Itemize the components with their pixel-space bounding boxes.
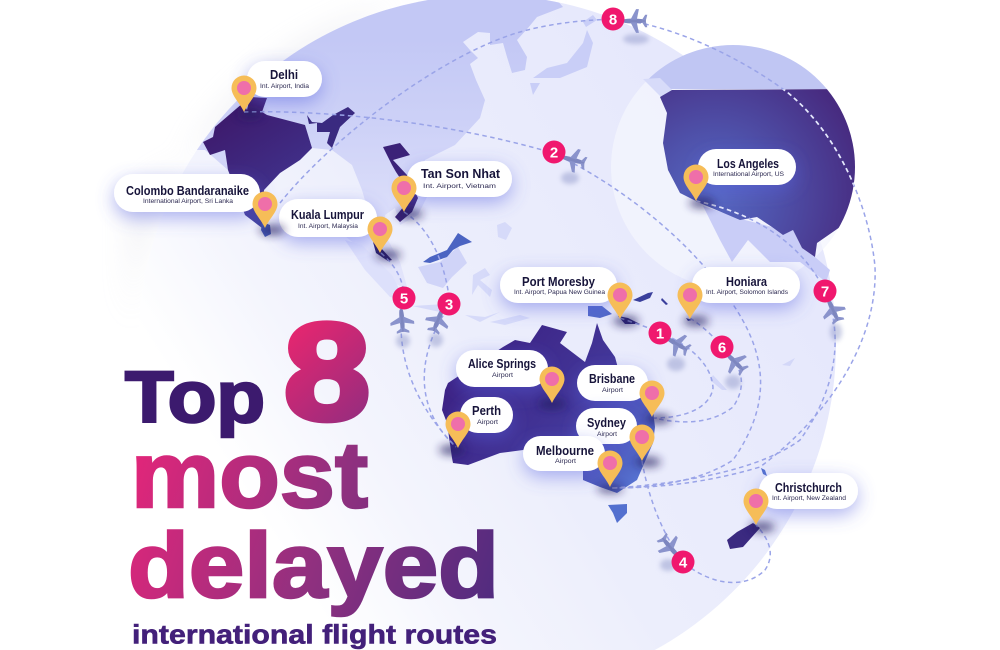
label: Melbourne: Melbourne bbox=[536, 444, 594, 458]
route 7 bbox=[612, 201, 835, 488]
pin: Delhi bbox=[232, 76, 256, 112]
route 4 bbox=[642, 461, 770, 582]
plane shadows bbox=[396, 34, 842, 571]
label: Melbourne bbox=[523, 436, 605, 471]
route 3 bbox=[404, 212, 456, 447]
badge 7: 7 bbox=[821, 284, 829, 300]
route 2 bbox=[244, 112, 761, 488]
title: Top: Top bbox=[125, 358, 265, 438]
pin: Colombo bbox=[252, 192, 278, 228]
label: Colombo Bandaranaike bbox=[114, 174, 260, 212]
plane 4 bbox=[652, 529, 686, 563]
land: Indonesia bbox=[412, 222, 530, 325]
label: Honiara: Int. Airport, Solomon Islands bbox=[706, 289, 788, 296]
title: delayed: delayed bbox=[128, 515, 499, 617]
land: Borneo bbox=[418, 247, 467, 288]
plane 1 bbox=[661, 328, 694, 361]
land: New Caledonia bbox=[710, 358, 795, 390]
land: East Malaysia bbox=[423, 233, 472, 263]
land: Vietnam bbox=[383, 143, 418, 222]
label: Brisbane: Brisbane bbox=[589, 372, 635, 386]
label: Melbourne: Airport bbox=[555, 458, 576, 465]
badge 1 bbox=[648, 322, 672, 344]
plane 2 bbox=[559, 146, 589, 175]
land: Canada bbox=[649, 45, 827, 90]
label: Tan Son Nhat bbox=[407, 161, 512, 197]
label: Perth: Perth bbox=[472, 404, 501, 418]
land: North-east India bbox=[307, 107, 355, 148]
label: Alice Springs bbox=[456, 350, 548, 387]
label: Brisbane: Airport bbox=[602, 387, 623, 394]
land: Peninsular Malaysia bbox=[373, 242, 392, 261]
title bbox=[125, 296, 499, 650]
land: Alaska strip bbox=[643, 78, 672, 100]
badge 4 bbox=[672, 550, 694, 574]
title: most: most bbox=[131, 422, 368, 527]
pin: Sydney bbox=[630, 424, 654, 461]
label: Alice Springs: Airport bbox=[492, 372, 513, 379]
globe shadow bbox=[130, 0, 560, 330]
route 8 bbox=[280, 19, 875, 488]
pin: Melbourne bbox=[598, 450, 622, 487]
route 1 bbox=[620, 318, 713, 418]
label: Alice Springs: Alice Springs bbox=[468, 357, 536, 371]
pin: Kuala Lumpur bbox=[368, 216, 392, 253]
badge 6: 6 bbox=[718, 340, 726, 356]
label: Port Moresby bbox=[500, 267, 617, 303]
badge 3 bbox=[438, 292, 460, 316]
land: Sri Lanka bbox=[261, 222, 271, 237]
label: Brisbane bbox=[577, 365, 648, 401]
badge 8 bbox=[602, 8, 624, 30]
land: New Britain and Solomon Islands bbox=[633, 292, 692, 321]
pin: Tan Son Nhat bbox=[392, 176, 416, 212]
label: Honiara bbox=[692, 267, 800, 303]
subtitle: international flight routes bbox=[132, 620, 497, 650]
label: Sydney: Sydney bbox=[587, 416, 626, 430]
plane 3 bbox=[422, 305, 453, 337]
badge 7 bbox=[814, 280, 836, 302]
label: Los Angeles: Los Angeles bbox=[717, 157, 779, 171]
label: Christchurch: Int. Airport, New Zealand bbox=[772, 495, 846, 502]
pin: Brisbane bbox=[640, 380, 664, 417]
label: Port Moresby: Int. Airport, Papua New Guinea bbox=[514, 289, 605, 296]
land: Asia bbox=[197, 0, 563, 287]
pin: Honiara bbox=[678, 282, 702, 319]
badge 6 bbox=[710, 336, 734, 358]
label: Sydney: Airport bbox=[597, 431, 617, 438]
label: Tan Son Nhat: Tan Son Nhat bbox=[421, 167, 501, 181]
badge 8: 8 bbox=[609, 12, 617, 28]
pin: Alice Springs bbox=[540, 366, 564, 403]
North America circle bbox=[611, 45, 855, 289]
land: Australia bbox=[442, 323, 655, 493]
label: Christchurch bbox=[759, 473, 858, 509]
badge 4: 4 bbox=[679, 554, 688, 572]
label: Colombo Bandaranaike: Colombo Bandaranaike bbox=[126, 184, 249, 198]
land: Papua New Guinea bbox=[588, 306, 612, 318]
badge 1: 1 bbox=[656, 326, 664, 342]
route 6 bbox=[654, 318, 741, 422]
globe bbox=[138, 0, 836, 650]
plane 6 bbox=[719, 346, 753, 380]
badge 2 bbox=[542, 140, 566, 164]
route 5 bbox=[381, 253, 456, 447]
pin: Port Moresby bbox=[608, 282, 632, 319]
plane 8 bbox=[623, 9, 647, 33]
land: Tasmania bbox=[608, 504, 627, 523]
badge 5 bbox=[392, 286, 416, 310]
land: New Zealand north island bbox=[761, 468, 767, 476]
pin: Perth bbox=[446, 412, 470, 448]
plane 5 bbox=[389, 308, 415, 334]
land: Mexico bbox=[703, 206, 830, 282]
label: Delhi: Delhi bbox=[270, 68, 298, 82]
pin: Los Angeles bbox=[684, 164, 708, 201]
badge 5: 5 bbox=[400, 290, 408, 308]
label: Delhi bbox=[247, 61, 322, 97]
title: 8: 8 bbox=[284, 296, 370, 449]
label: Kuala Lumpur: Int. Airport, Malaysia bbox=[298, 223, 358, 230]
label: Kuala Lumpur: Kuala Lumpur bbox=[291, 208, 364, 222]
white route dashes over USA bbox=[696, 89, 854, 218]
label: Los Angeles bbox=[698, 149, 796, 185]
land: USA bbox=[660, 89, 860, 257]
label: Sydney bbox=[576, 408, 637, 444]
label: Port Moresby: Port Moresby bbox=[522, 275, 595, 289]
label: Perth bbox=[460, 397, 513, 433]
label: Kuala Lumpur bbox=[279, 199, 377, 237]
land: Japan bbox=[530, 15, 597, 95]
pin shadows bbox=[238, 110, 775, 532]
map: pale land masses bbox=[197, 0, 597, 325]
badge 2: 2 bbox=[550, 144, 558, 162]
pin: Christchurch bbox=[744, 488, 768, 525]
label: Christchurch: Christchurch bbox=[775, 481, 842, 495]
land: India bbox=[203, 97, 312, 228]
label: Colombo Bandaranaike: International Airport, Sri Lanka bbox=[143, 198, 233, 205]
label: Los Angeles: International Airport, US bbox=[713, 171, 784, 178]
flight routes bbox=[244, 19, 875, 582]
label: Delhi: Int. Airport, India bbox=[260, 83, 309, 90]
label: Tan Son Nhat: Int. Airport, Vietnam bbox=[423, 183, 496, 190]
label: Perth: Airport bbox=[477, 419, 498, 426]
land: New Zealand south island bbox=[727, 523, 760, 549]
land: Sumatra bbox=[346, 240, 398, 298]
plane 7 bbox=[817, 295, 849, 327]
badge 3: 3 bbox=[445, 296, 453, 314]
label: Honiara: Honiara bbox=[726, 275, 768, 289]
